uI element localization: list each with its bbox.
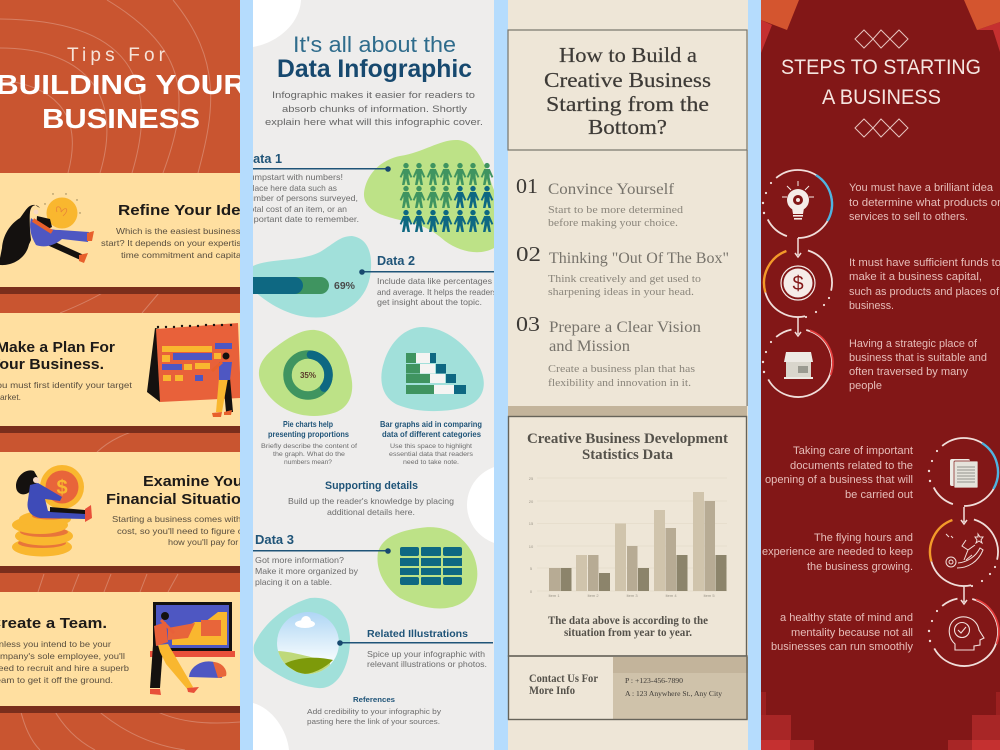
step 02: sharpening ideas in your head. (548, 287, 694, 298)
heading: building your business (0, 74, 240, 128)
title: Data Infographic (277, 55, 472, 83)
text: mindset: businesses can run smoothly (771, 641, 913, 653)
section: data 3 (253, 527, 477, 608)
step 01 (516, 174, 684, 229)
bar chart (529, 476, 727, 598)
card: create a team (0, 592, 240, 713)
panel: data infographic (253, 0, 494, 750)
step 03: and Mission (549, 338, 630, 355)
step 02 (516, 242, 729, 298)
arrow 5 to 6 (961, 587, 967, 604)
decorative white blobs (253, 0, 494, 750)
text: data 2: and average. It helps the readers (377, 287, 497, 297)
text: examine your financial situation: Starting a business comes with a (112, 514, 249, 524)
ring 4 (916, 424, 1000, 520)
heading: data 2: Data 2 (377, 253, 415, 268)
chart heading (527, 431, 728, 463)
intro text: Infographic makes it easier for readers to (272, 90, 475, 101)
chart: donut 35%: 35% (300, 371, 316, 380)
text: data 3 (255, 555, 359, 587)
section: data 1 (244, 140, 494, 252)
caption: pie charts (261, 419, 357, 466)
progress bar (253, 277, 355, 294)
caption: bar graphs: Use this space to highlight (390, 443, 472, 450)
bar chart: 10 (529, 544, 534, 549)
bar chart: 20 (529, 499, 534, 504)
section: data 2 (240, 236, 497, 318)
illustration: woman on coin stack (12, 465, 92, 556)
corner decorations (761, 0, 1000, 53)
heading: building your business: BUSINESS (42, 103, 200, 134)
text: documents: documents related to the (790, 460, 913, 472)
arrow 2 to 3 (795, 317, 801, 336)
contact box (508, 656, 748, 720)
text: related illustrations: relevant illustrations or photos. (367, 659, 487, 669)
icon: dollar coin: $ (792, 273, 804, 295)
caption: pie charts: presenting proportions (268, 429, 349, 439)
contact box: Contact Us For (529, 673, 598, 685)
caption: bar graphs: essential data that readers (389, 451, 474, 458)
text: experience: experience are needed to keep (762, 546, 913, 558)
panel: steps to starting a business (750, 0, 1000, 750)
text: mindset: mentality because not all (791, 627, 913, 639)
contact box: More Info (529, 685, 575, 697)
chart heading: Creative Business Development (527, 431, 728, 447)
caption: pie charts: numbers mean? (284, 459, 332, 466)
step 03: Create a business plan that has (548, 364, 695, 375)
intro text: explain here what will this infographic cover. (265, 117, 483, 128)
caption: pie charts: Briefly describe the content of (261, 443, 357, 450)
bar chart: 0 (530, 589, 533, 594)
text: documents: opening of a business that will (765, 474, 913, 486)
step 01: Convince Yourself (548, 181, 675, 198)
step 01: 01 (516, 174, 538, 198)
diamonds bottom (855, 119, 908, 137)
background contour lines (0, 0, 240, 750)
text: data 2: Include data like percentages (377, 276, 492, 286)
title box (508, 30, 747, 150)
step 2: funds (756, 241, 1000, 325)
text: related illustrations (367, 649, 487, 669)
title box: How to Build a (559, 43, 698, 67)
heading: refine your idea: Refine Your Idea (118, 202, 251, 219)
heading: tips for: Tips For (67, 45, 166, 66)
step 03: Prepare a Clear Vision (549, 319, 701, 336)
bar chart: 5 (530, 566, 533, 571)
text: idea: You must have a brilliant idea (849, 182, 994, 194)
caption: bar graphs: need to take note. (403, 459, 459, 466)
references: pasting here the link of your sources. (307, 717, 440, 726)
caption: pie charts: the graph. What do the (273, 451, 345, 458)
photo: landscape (276, 612, 340, 675)
step 01: Start to be more determined (548, 205, 684, 216)
text: place: people (849, 380, 882, 392)
text: examine your financial situation: cost, so you'll need to figure out (117, 526, 252, 536)
caption: bar graphs (380, 419, 482, 466)
heading: building your business: BUILDING YOUR (0, 69, 246, 100)
card: refine your idea (0, 173, 251, 294)
text: data 1: Place here data such as (247, 183, 337, 193)
ring 1 (750, 156, 846, 252)
text: refine your idea (101, 228, 240, 260)
text: data 3: Got more information? (255, 555, 344, 565)
caption: bar graphs: Bar graphs aid in comparing (380, 419, 482, 429)
icon: light bulb (782, 181, 814, 220)
panel: creative business (508, 0, 748, 750)
text: examine your financial situation (112, 516, 240, 546)
chart caption: The data above is according to the (548, 615, 708, 627)
text: make a plan (0, 382, 132, 400)
supporting details: additional details here. (327, 507, 415, 517)
title: It's all about the (293, 32, 456, 57)
caption: pie charts: Pie charts help (283, 419, 333, 429)
text: mindset (771, 612, 913, 653)
text: funds: It must have sufficient funds to (849, 257, 1000, 269)
text: refine your idea: Which is the easiest business to (116, 226, 251, 236)
text: data 1 (253, 174, 358, 224)
step 02: Thinking "Out Of The Box" (549, 250, 729, 267)
step 6: mindset (771, 584, 1000, 680)
illustration: calendar and person (147, 323, 241, 417)
text: place: Having a strategic place of (849, 338, 978, 350)
intro text (265, 90, 483, 128)
text: data 3: placing it on a table. (255, 577, 332, 587)
title box: Starting from the (546, 92, 709, 116)
bar chart: Item 4 (665, 593, 677, 598)
text: place (849, 338, 987, 392)
text: funds: make it a business capital, (849, 271, 982, 283)
text: documents (765, 445, 913, 501)
text: data 2 (377, 278, 494, 306)
icon: climber and gear (946, 534, 983, 568)
step 1: idea (750, 156, 1000, 252)
heading: examine your financial situation (107, 475, 240, 504)
text: funds: business. (849, 300, 894, 312)
text: data 2: get insight about the topic. (377, 297, 482, 307)
text: data 1: Jumpstart with numbers! (245, 172, 343, 182)
text: refine your idea: time commitment and capital. (121, 250, 246, 260)
heading: data 1: Data 1 (244, 151, 282, 166)
bar chart: Item 5 (703, 593, 715, 598)
chart heading: Statistics Data (582, 447, 674, 463)
text: experience (762, 532, 913, 573)
illustration: woman with light bulb (0, 193, 94, 265)
text: data 1: number of persons surveyed, (244, 193, 358, 203)
bar chart: 25 (529, 476, 534, 481)
panel: tips for building your business (0, 0, 252, 750)
text: idea: services to sell to others. (849, 211, 968, 223)
text: idea (849, 182, 1000, 223)
title box: Bottom? (588, 115, 667, 139)
text: place: business that is suitable and (849, 352, 987, 364)
chart: donut 35% (259, 330, 352, 416)
step 03 (516, 312, 701, 389)
title: A BUSINESS (822, 86, 941, 109)
ring 2 (756, 241, 840, 325)
title: STEPS TO STARTING (781, 56, 981, 79)
intro text: absorb chunks of information. Shortly (282, 104, 467, 115)
step 4: documents (765, 424, 1000, 520)
bar chart: Item 1 (548, 593, 560, 598)
bar chart: Item 2 (587, 593, 599, 598)
supporting details: Supporting details (325, 480, 418, 492)
text: related illustrations: Spice up your infographic with (367, 649, 485, 659)
step 03: flexibility and innovation in it. (548, 378, 691, 389)
supporting details (288, 480, 454, 517)
chart caption (548, 615, 708, 639)
heading: data 3: Data 3 (255, 532, 294, 547)
text: mindset: a healthy state of mind and (780, 612, 913, 624)
references: Add credibility to your infographic by (307, 707, 441, 716)
bar chart: 15 (529, 521, 534, 526)
text: examine your financial situation: how you'll pay for it. (168, 537, 248, 547)
text: refine your idea: start? It depends on your expertise, (101, 238, 249, 248)
text: data 1: important date to remember. (244, 214, 359, 224)
text: experience: the business growing. (807, 561, 913, 573)
text: funds (849, 257, 1000, 312)
heading: examine your financial situation: Examine Your (143, 473, 249, 490)
diamonds top (855, 30, 908, 48)
text: documents: Taking care of important (793, 445, 913, 457)
references (307, 697, 441, 726)
text: place: often traversed by many (849, 366, 968, 378)
step 5: experience (762, 510, 1000, 594)
supporting details: Build up the reader's knowledge by placing (288, 496, 454, 506)
step 02: Think creatively and get used to (548, 274, 701, 285)
contact box: P : +123-456-7890 (625, 676, 683, 685)
references: References (353, 697, 395, 704)
card: examine your financial situation (0, 452, 252, 573)
text: documents: be carried out (845, 489, 913, 501)
icon: store (784, 352, 813, 379)
text: experience: The flying hours and (814, 532, 913, 544)
chart caption: situation from year to year. (564, 627, 692, 639)
contact box: A : 123 Anywhere St., Any City (625, 689, 722, 698)
step 02: 02 (516, 242, 541, 266)
ring 3 (750, 315, 846, 411)
chart box (508, 416, 746, 656)
arrow 4 to 5 (961, 507, 967, 524)
heading: related illustrations: Related Illustrations (367, 629, 468, 640)
bottom pixel decoration (761, 692, 1000, 750)
caption: bar graphs: data of different categories (382, 429, 481, 439)
chart: stacked bars (381, 327, 484, 411)
title (781, 56, 981, 109)
progress bar: 69% (334, 281, 355, 292)
illustration: presenter at screen (150, 602, 235, 695)
text: create a team (0, 639, 129, 685)
illustration: woman on coin stack: $ (56, 477, 68, 499)
title (278, 36, 472, 82)
card: make a plan (0, 313, 241, 433)
table graphic (400, 547, 462, 585)
text: funds: such as products and places of (849, 286, 1000, 298)
pictogram: people (400, 163, 493, 232)
title box: Creative Business (544, 68, 711, 92)
heading: examine your financial situation: Financial Situation (106, 491, 251, 508)
heading: make a plan (0, 341, 115, 369)
arrow 1 to 2 (795, 238, 801, 257)
text: data 3: Make it more organized by (255, 566, 359, 576)
bar chart: Item 3 (626, 593, 638, 598)
step 01: before making your choice. (548, 218, 678, 229)
step 3: place (750, 315, 987, 411)
icon: documents (950, 459, 978, 488)
icon: head with check (949, 617, 984, 650)
icon: dollar coin (781, 266, 815, 300)
ring 5 (922, 510, 1000, 594)
ring 6 (916, 584, 1000, 680)
step 03: 03 (516, 312, 540, 336)
section: related illustrations (254, 598, 493, 688)
text: data 1: total cost of an item, or an (247, 204, 347, 214)
text: idea: to determine what products or (849, 197, 1000, 209)
